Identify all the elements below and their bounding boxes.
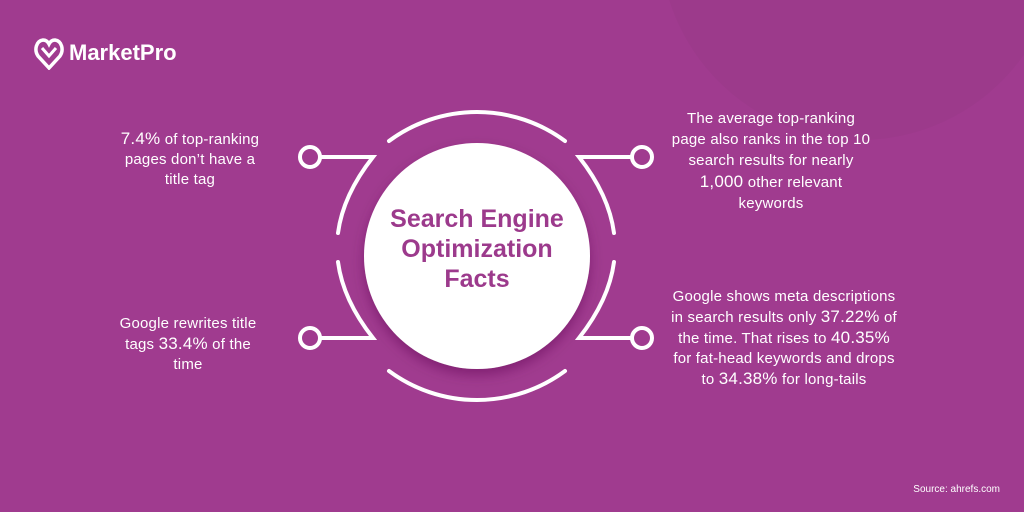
fact 2: The average top-ranking bbox=[687, 110, 855, 127]
logo bbox=[34, 38, 177, 70]
fact 2: 1,000 other relevant bbox=[700, 172, 842, 191]
fact 3: tags 33.4% of the bbox=[125, 334, 251, 353]
fact 2: keywords bbox=[739, 195, 803, 212]
fact 1: 7.4% of top-ranking bbox=[121, 129, 259, 148]
fact 3 bbox=[120, 315, 256, 373]
logo: MarketPro bbox=[69, 40, 177, 65]
fact 2: page also ranks in the top 10 bbox=[672, 131, 870, 148]
fact 4: in search results only 37.22% of bbox=[671, 307, 897, 326]
fact 4: to 34.38% for long-tails bbox=[701, 369, 866, 388]
fact 4 bbox=[671, 288, 897, 388]
fact 4: the time. That rises to 40.35% bbox=[678, 328, 890, 347]
fact 2 bbox=[672, 110, 870, 212]
fact 3: Google rewrites title bbox=[120, 315, 256, 332]
fact 1: pages don’t have a bbox=[125, 151, 255, 168]
source: Source: ahrefs.com bbox=[913, 484, 1000, 495]
fact 1 bbox=[121, 129, 259, 188]
fact 2: search results for nearly bbox=[688, 152, 854, 169]
fact 3: time bbox=[173, 356, 203, 373]
fact 4: for fat-head keywords and drops bbox=[673, 350, 895, 367]
fact 1: title tag bbox=[165, 171, 215, 188]
title: Search Engine Optimization Facts bbox=[390, 205, 564, 293]
fact 4: Google shows meta descriptions bbox=[673, 288, 895, 305]
